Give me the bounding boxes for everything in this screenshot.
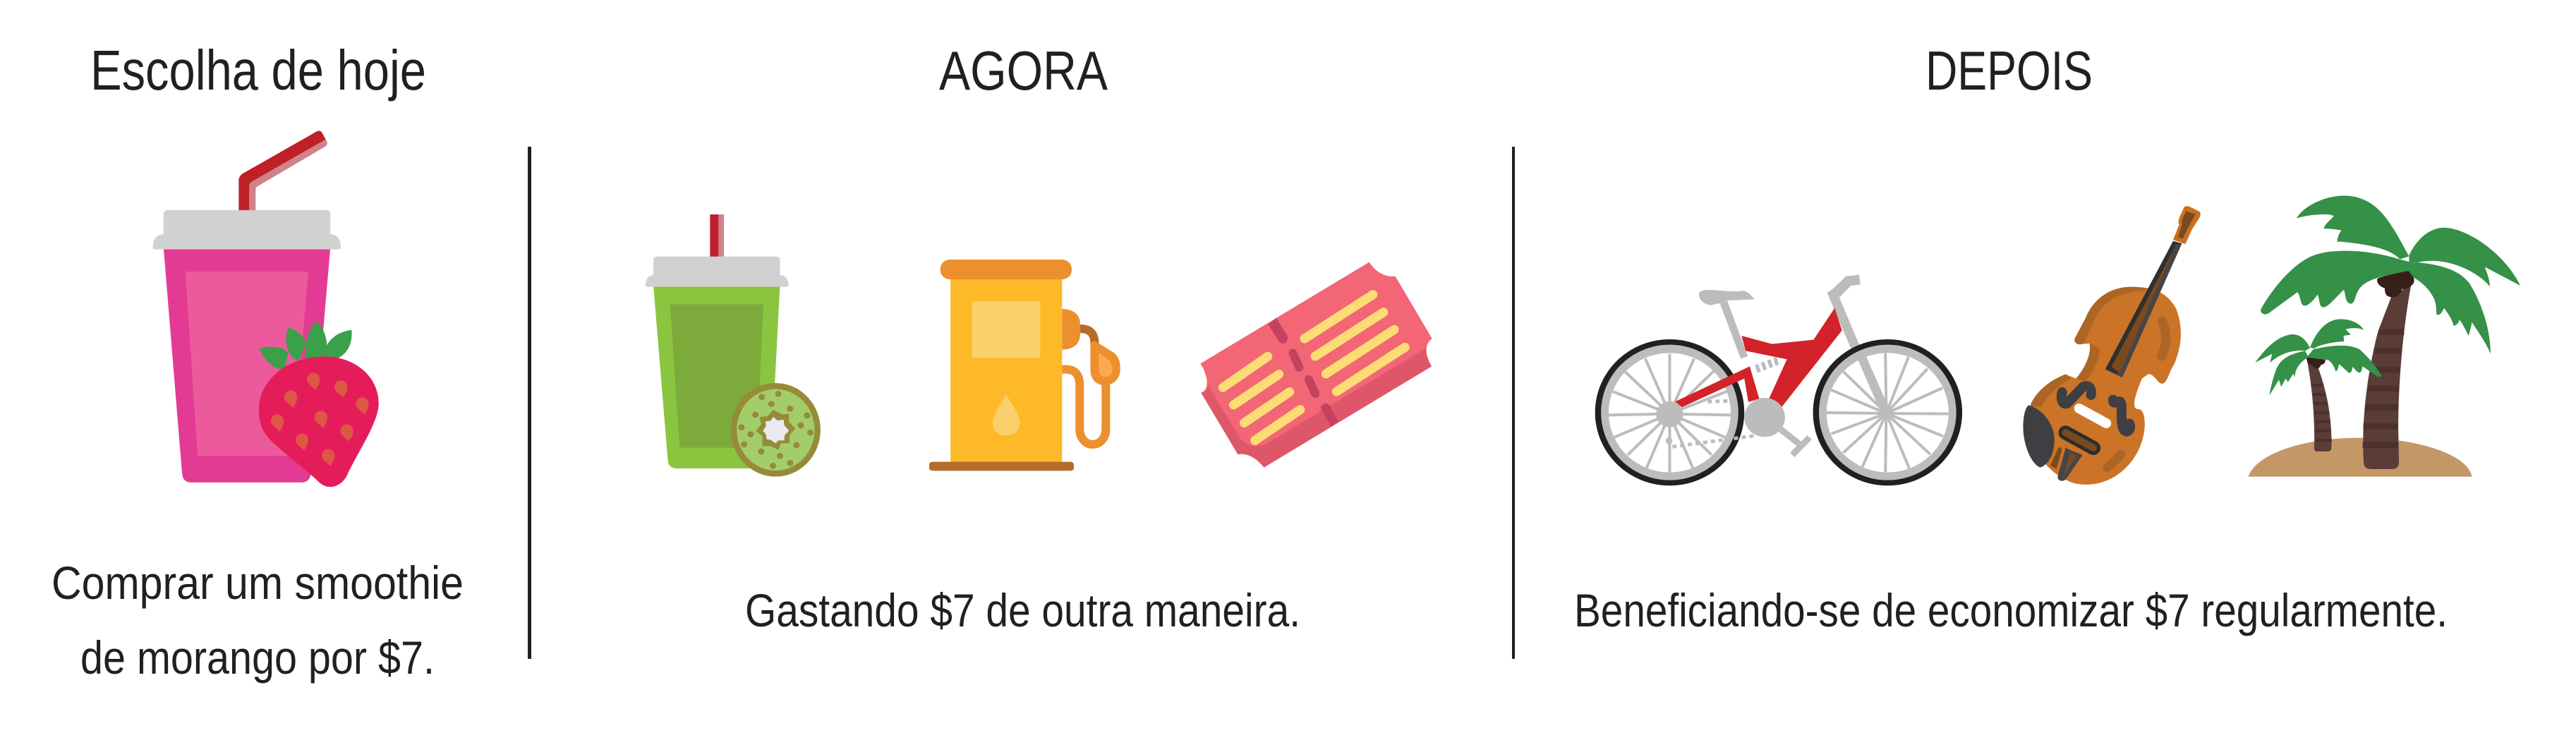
small palm leaves xyxy=(2255,319,2381,396)
cup body xyxy=(164,250,330,483)
hose and nozzle xyxy=(1062,329,1120,444)
white slot xyxy=(2079,408,2106,423)
island xyxy=(2249,438,2472,477)
violin body xyxy=(2028,287,2181,485)
fingerboard xyxy=(2105,241,2182,377)
heading: DEPOIS: DEPOIS xyxy=(1925,40,2093,102)
fuel drop xyxy=(993,394,1020,435)
bridge xyxy=(2066,432,2093,448)
text: beneficiando-se: Beneficiando-se de economizar $7 regularmente. xyxy=(1574,584,2448,636)
text: comprar um smoothie: Comprar um smoothie xyxy=(52,557,464,609)
big palm coconuts xyxy=(2377,271,2414,297)
ticket text bars xyxy=(1223,295,1405,440)
text: comprar um smoothie xyxy=(52,557,464,684)
panel: depois xyxy=(1574,40,2520,636)
handlebar and fork top xyxy=(1827,274,1861,348)
panel: agora xyxy=(646,40,1432,636)
cup xyxy=(653,286,780,468)
crank and pedal xyxy=(1744,398,1810,455)
f holes xyxy=(2062,386,2130,432)
icon: violin xyxy=(2023,206,2201,485)
lid xyxy=(646,257,789,287)
ticket shaded edge xyxy=(1201,348,1432,468)
small palm coconuts xyxy=(2306,356,2326,369)
chin rest xyxy=(2023,405,2055,468)
saddle and seat post xyxy=(1699,290,1754,358)
chain and shock xyxy=(1666,358,1777,447)
ticket body xyxy=(1200,262,1432,468)
text: gastando $7: Gastando $7 de outra maneira. xyxy=(745,584,1300,636)
straw xyxy=(710,214,724,257)
red frame xyxy=(1675,308,1842,407)
heading: AGORA: AGORA xyxy=(939,40,1108,102)
kiwi slice xyxy=(731,383,821,477)
pump screen xyxy=(972,301,1040,358)
small palm trunk xyxy=(2306,358,2332,451)
text: comprar um smoothie: de morango por $7. xyxy=(80,631,435,684)
lid xyxy=(153,210,341,250)
nozzle holder xyxy=(1062,309,1080,350)
scroll xyxy=(2173,206,2201,244)
rear wheel xyxy=(1595,339,1744,485)
tailpiece xyxy=(2050,447,2083,481)
pump top cap xyxy=(941,260,1072,279)
violin body shading xyxy=(2030,287,2166,468)
big palm trunk xyxy=(2363,284,2411,469)
icon: ticket xyxy=(1200,262,1432,468)
heading: Escolha de hoje: Escolha de hoje xyxy=(90,39,426,102)
ticket perforation xyxy=(1269,318,1338,427)
big palm leaves xyxy=(2261,195,2520,354)
panel: escolha de hoje xyxy=(52,39,464,684)
icon: strawberry smoothie xyxy=(153,131,379,487)
icon: green smoothie with kiwi xyxy=(646,214,821,477)
icon: bicycle xyxy=(1595,274,1962,485)
pump body xyxy=(950,277,1062,463)
icon: palm island xyxy=(2249,195,2520,477)
icon: gas pump xyxy=(929,260,1120,471)
pump base xyxy=(929,462,1074,471)
straw xyxy=(238,131,327,211)
strawberry xyxy=(259,322,379,487)
front wheel xyxy=(1813,339,1962,485)
